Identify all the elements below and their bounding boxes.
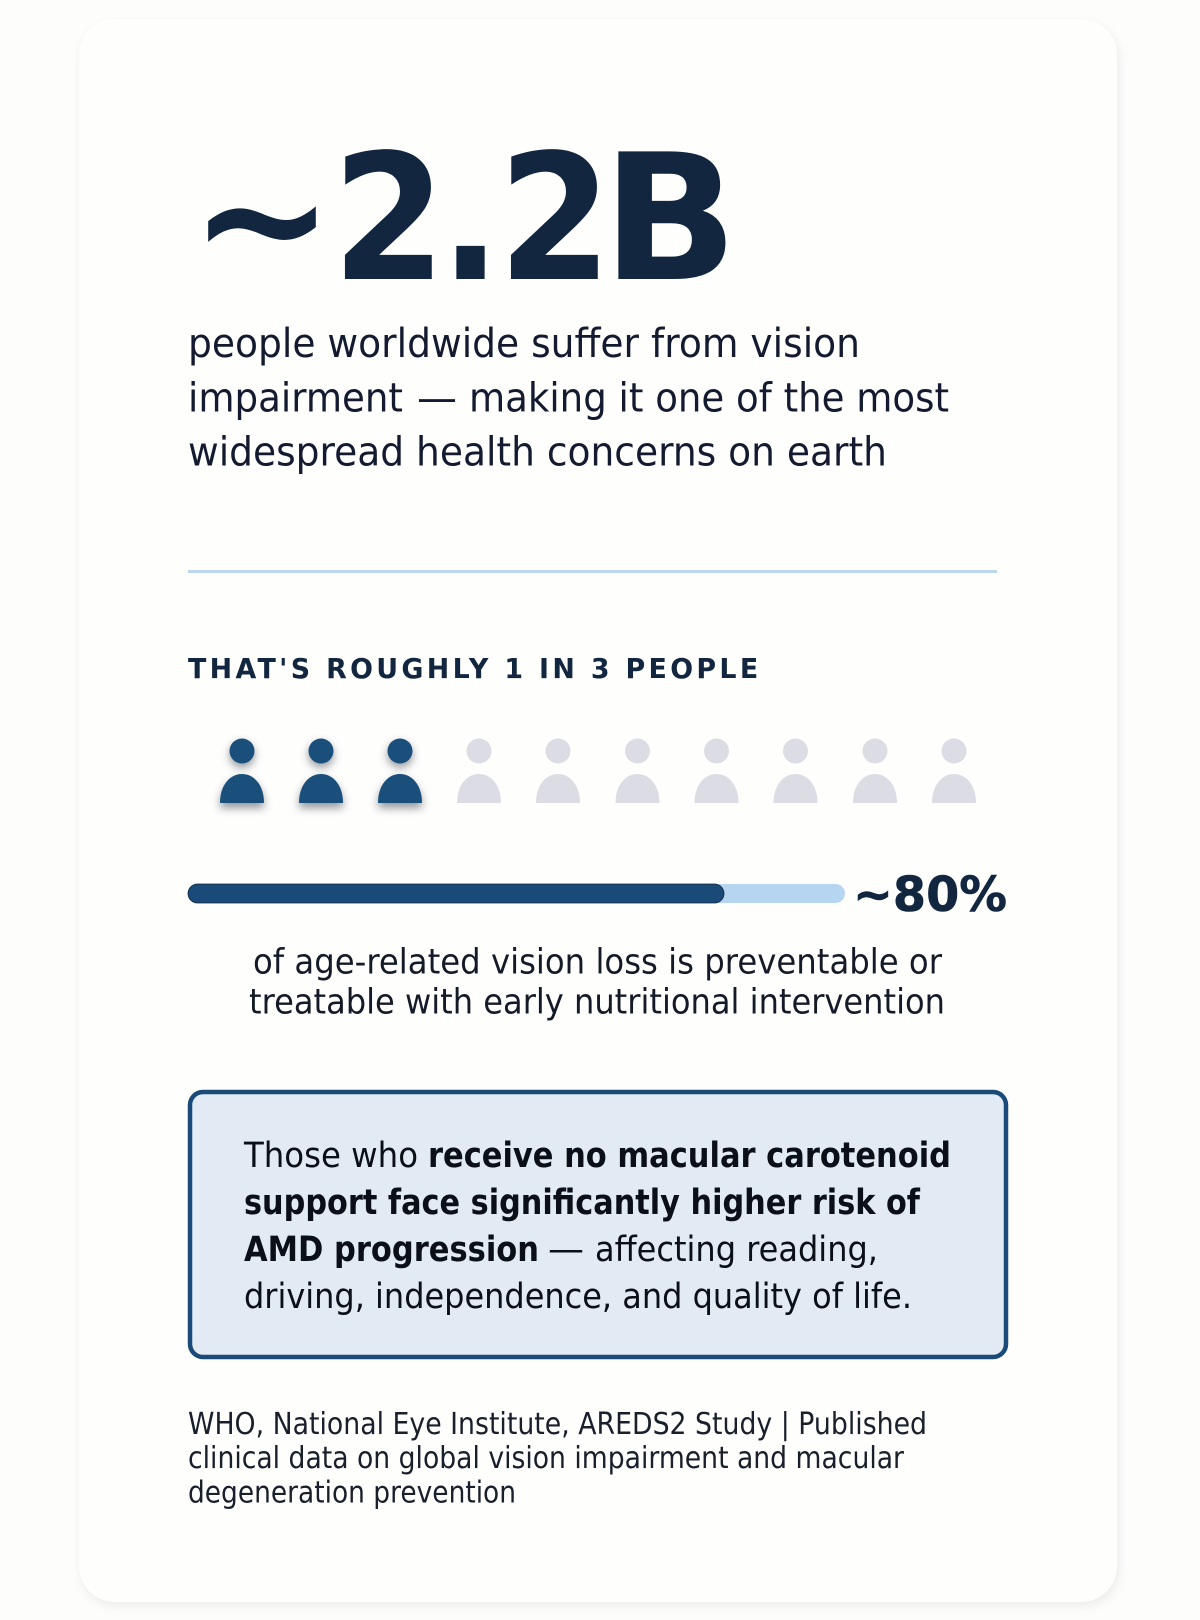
stat: ~80%: ~80% [853, 867, 1007, 923]
progress bar: 80 percent [188, 884, 845, 903]
callout text [243, 1136, 951, 1317]
callout text: receive no macular carotenoid [428, 1136, 951, 1176]
heading: one in three: THAT'S ROUGHLY 1 IN 3 PEOPLE [188, 654, 758, 685]
text block: preventable caption [249, 942, 945, 1022]
source citation [188, 1407, 927, 1510]
source citation: degeneration prevention [188, 1476, 516, 1510]
icon: grey person 7 [694, 738, 738, 803]
text block: vision impairment description: widespread health concerns on earth [188, 430, 887, 476]
icon: grey person 8 [774, 738, 818, 803]
callout: AMD risk [190, 1092, 1006, 1357]
icon: highlighted person 1 [220, 738, 264, 808]
icon: highlighted person 2 [299, 738, 343, 808]
icon: grey person 6 [616, 738, 660, 803]
callout text: support face significantly higher risk of [244, 1183, 921, 1223]
source citation: WHO, National Eye Institute, AREDS2 Study | Published [188, 1407, 927, 1442]
headline stat: ~2.2B: ~ [190, 118, 334, 321]
icon: grey person 9 [853, 738, 897, 803]
headline stat: ~2.2B: 2 [332, 118, 446, 321]
text block: vision impairment description: making it one of the most [469, 376, 949, 422]
headline stat: ~2.2B: . [440, 118, 501, 321]
headline stat: ~2.2B: B [602, 118, 738, 321]
headline stat: ~2.2B: 2 [498, 118, 612, 321]
callout text: affecting reading, [595, 1230, 878, 1270]
callout text: AMD progression [244, 1230, 539, 1270]
icon: grey person 4 [457, 738, 501, 803]
headline stat: ~2.2B [190, 118, 738, 321]
icon: highlighted person 3 [378, 738, 422, 808]
text block: preventable caption: treatable with early nutritional intervention [249, 982, 945, 1022]
icon: grey person 5 [536, 738, 580, 803]
text block: vision impairment description: impairment [188, 376, 403, 422]
text block: vision impairment description: people worldwide suffer from vision [188, 321, 860, 367]
icon: grey person 10 [932, 738, 976, 803]
callout text: Those who [243, 1136, 418, 1176]
callout text: — [548, 1230, 584, 1270]
text block: vision impairment description: — [417, 376, 457, 422]
text block: vision impairment description [188, 321, 949, 476]
pictogram: 1 in 3 people [220, 738, 976, 808]
text block: preventable caption: of age-related vision loss is preventable or [253, 942, 943, 982]
source citation: clinical data on global vision impairment and macular [188, 1441, 905, 1476]
callout text: driving, independence, and quality of life. [244, 1277, 912, 1317]
